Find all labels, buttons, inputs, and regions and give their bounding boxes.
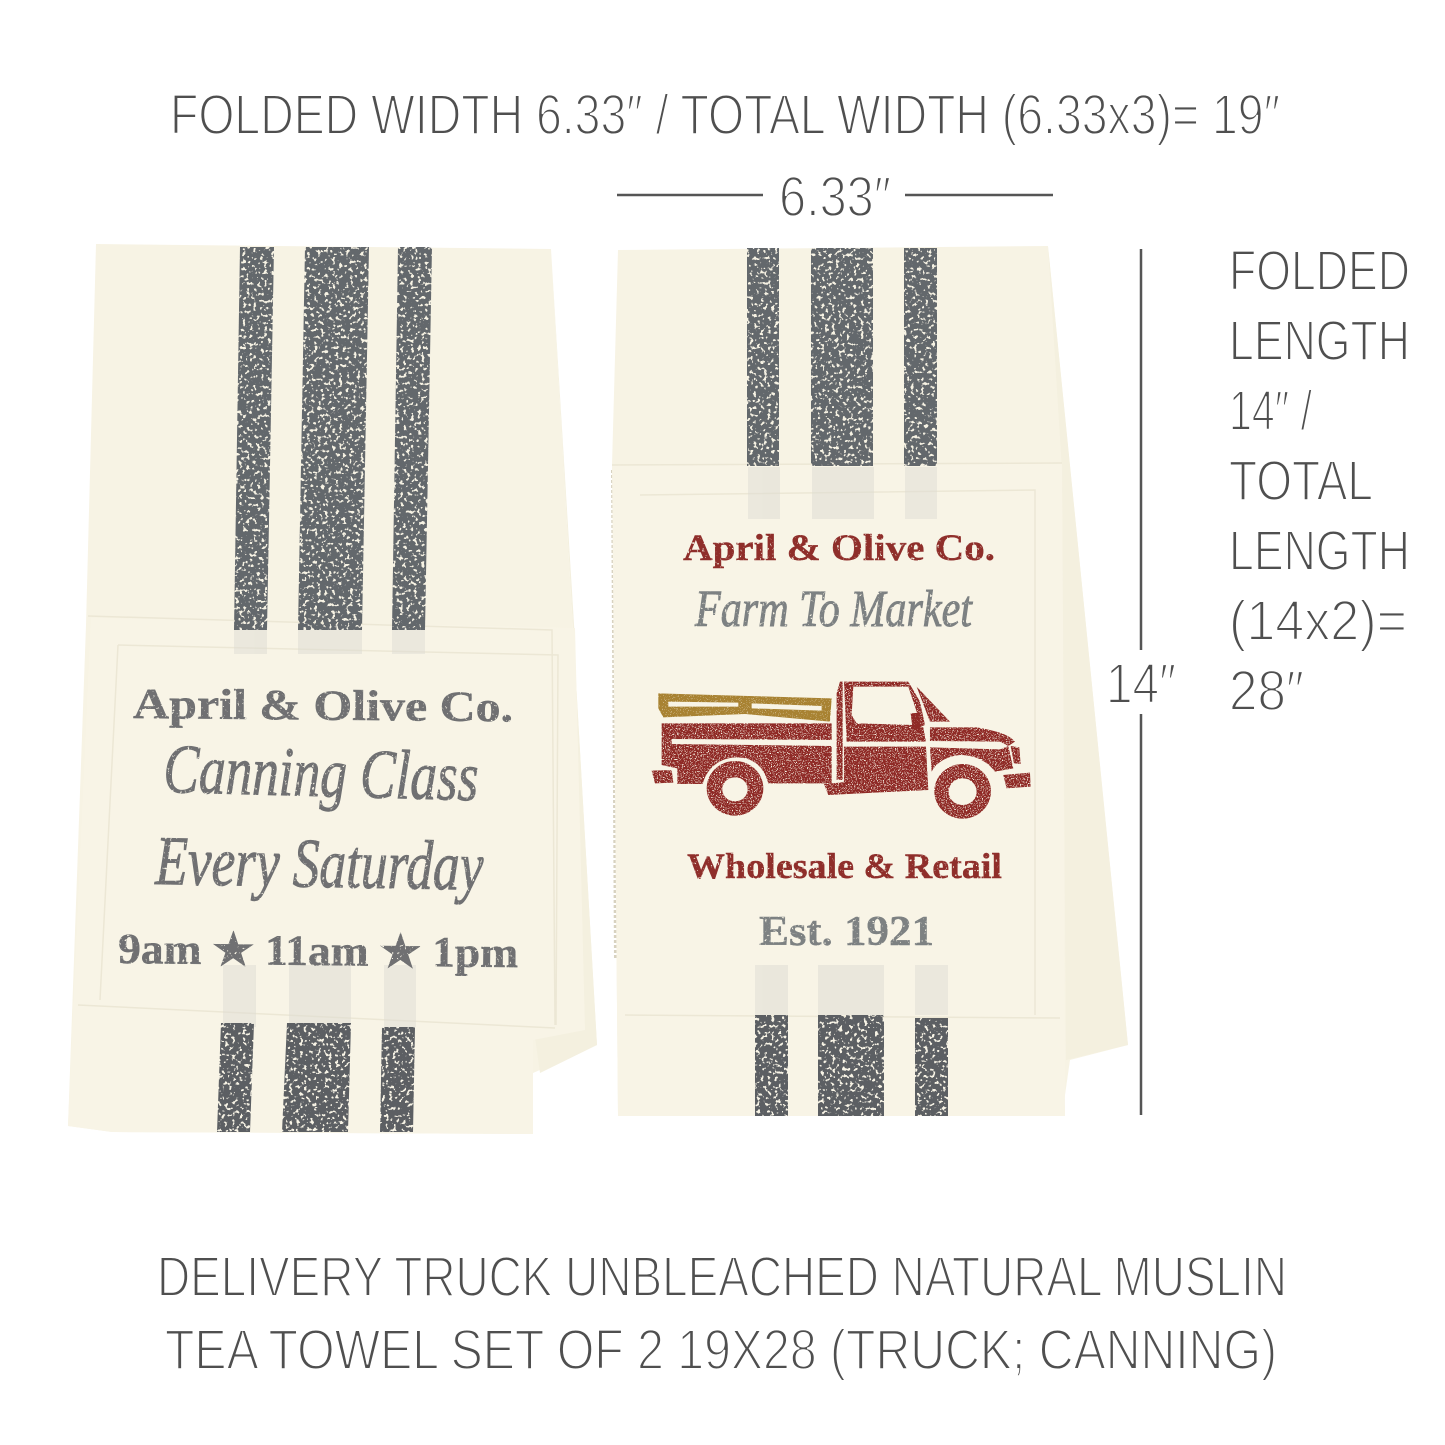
seam lines [78,616,558,1028]
text block: folded and total length: 28″ [1229,659,1304,723]
width dimension: 6.33 inches: 6.33″ [779,165,891,229]
front flap of right towel [612,463,1065,1116]
panel: left towel, canning class [68,244,597,1134]
bottom stripes [755,1015,948,1116]
towel print text: April & Olive Co. [133,681,513,731]
ghost stripes [223,630,425,1027]
towel print text: Every Saturday [154,823,485,906]
panel: right towel, delivery truck [612,246,1128,1116]
fold shading [1048,246,1128,1060]
bottom stripes [217,1023,415,1132]
top stripes [234,247,432,630]
top stripes [747,248,937,466]
title: product name [157,1245,1287,1382]
seam lines [612,463,1062,1018]
text block: folded and total length: 14″ / [1229,379,1312,443]
towel text: Est. 1921: Est. 1921 [759,909,934,955]
towel print text: 9am ★ 11am ★ 1pm [118,926,519,977]
towel script: Farm To Market: Farm To Market [694,581,973,638]
towel heading: April and Olive Co.: April & Olive Co. [683,528,995,569]
front flap of left towel [68,618,585,1134]
title: product name: TEA TOWEL SET OF 2 19X28 (TRUCK; CANNING) [165,1318,1277,1382]
towel print text: Canning Class [163,731,479,816]
ghost stripes [748,467,948,1015]
back layer of right towel [612,246,1128,1116]
length dimension: 14 inches: 14″ [1106,652,1176,716]
icon: pickup truck [652,682,1031,819]
text block: folded and total length: TOTAL [1229,449,1373,513]
fold shading [534,249,597,1073]
length dimension: 14 inches [1100,249,1180,1115]
fringe edge [613,470,616,960]
towel print text [118,681,519,977]
text block: folded and total length [1229,239,1410,723]
towel text: Wholesale and Retail: Wholesale & Retail [687,846,1002,886]
text block: folded and total length: (14x2)= [1229,589,1407,653]
back layer of left towel [68,244,597,1134]
